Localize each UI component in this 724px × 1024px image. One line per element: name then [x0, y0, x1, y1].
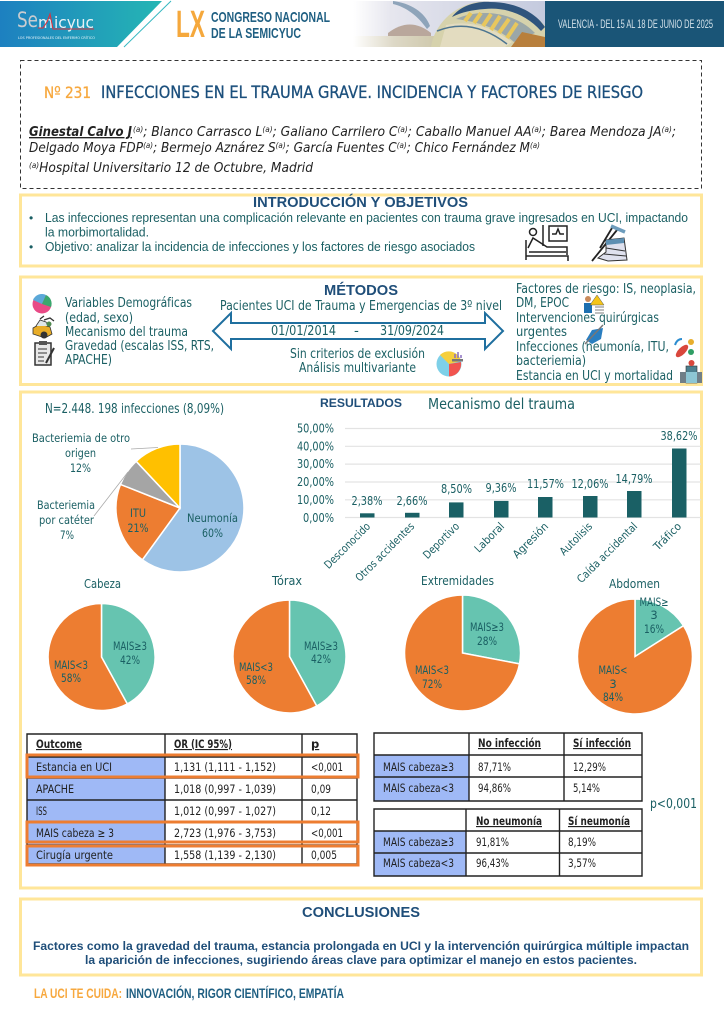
table: pneumonia by MAIS cabeza: Sí neumonía — [568, 814, 630, 828]
table: multivariate outcomes: ISS — [36, 804, 47, 818]
right variables list — [516, 281, 696, 384]
table: multivariate outcomes: Cirugía urgente — [36, 848, 113, 862]
table: multivariate outcomes: 0,09 — [311, 782, 331, 796]
panel: introduction and objectives — [20, 193, 702, 266]
heading: INTRODUCCIÓN Y OBJETIVOS — [253, 193, 468, 211]
pie chart: Cabeza: MAIS≥3 — [113, 639, 147, 653]
bar chart: trauma mechanism: 14,79% — [616, 471, 653, 486]
table: multivariate outcomes: 1,131 (1,111 - 1,152) — [174, 760, 276, 774]
pie chart: Extremidades: MAIS<3 — [415, 663, 449, 677]
table: infection by MAIS cabeza: MAIS cabeza≥3 — [383, 760, 454, 774]
bar chart: trauma mechanism: Tráfico — [650, 520, 684, 554]
pie chart: Extremidades: 28% — [477, 634, 497, 648]
footer slogan: LA UCI TE CUIDA: — [34, 985, 122, 1001]
pie chart: Abdomen — [577, 576, 692, 714]
pie chart: Abdomen: MAIS≥ — [640, 595, 668, 609]
table: multivariate outcomes: p — [311, 737, 319, 751]
logo band — [0, 1, 171, 47]
pie chart: infection types: por catéter — [39, 513, 94, 527]
pie chart: Abdomen: 84% — [603, 690, 623, 704]
pie chart: Abdomen: 3 — [650, 608, 658, 622]
arrow: study period: 31/09/2024 — [380, 323, 444, 339]
authors: ; Blanco Carrasco L — [143, 124, 262, 140]
pie chart: Tórax — [233, 573, 346, 713]
pie chart: Abdomen: Abdomen — [609, 576, 660, 591]
conclusion text: Factores como la gravedad del trauma, estancia prolongada en UCI y la intervención quirúrgica múltiple impactan — [33, 939, 689, 953]
table: multivariate outcomes: <0,001 — [311, 826, 343, 840]
left variables list: Mecanismo del trauma — [65, 324, 188, 340]
bar chart: trauma mechanism: Agresión — [510, 520, 551, 561]
authors: ; Barea Mendoza JA — [542, 124, 662, 140]
pie chart: Extremidades: 72% — [422, 677, 442, 691]
pie chart: Cabeza: 42% — [120, 653, 140, 667]
pie chart: Tórax: Tórax — [271, 573, 302, 588]
bar chart: trauma mechanism: 12,06% — [572, 476, 609, 491]
right variables list: Estancia en UCI y mortalidad — [516, 368, 673, 384]
pie chart: Tórax: MAIS<3 — [239, 660, 273, 674]
table: infection by MAIS cabeza: Sí infección — [573, 736, 631, 750]
bar chart: trauma mechanism: 2,38% — [352, 493, 383, 508]
icon: pie and bars — [436, 351, 463, 376]
bar chart: trauma mechanism: Laboral — [472, 520, 507, 555]
table: multivariate outcomes: 0,12 — [311, 804, 331, 818]
pie chart: infection types: Bacteriemia — [37, 498, 95, 512]
table: multivariate outcomes: MAIS cabeza ≥ 3 — [36, 826, 114, 840]
bar chart: trauma mechanism: 9,36% — [486, 480, 517, 495]
affiliation: (a) — [29, 161, 39, 170]
table: infection by MAIS cabeza: 5,14% — [573, 781, 600, 795]
bar chart: trauma mechanism: 20,00% — [297, 474, 334, 489]
abstract number: Nº 231 — [44, 83, 91, 102]
authors: Delgado Moya FDP — [29, 140, 156, 156]
pie chart: Abdomen: 16% — [644, 622, 664, 636]
conclusion text — [33, 939, 689, 967]
intro text: Las infecciones representan una complicación relevante en pacientes con trauma grave ingresados en UCI, impactando — [45, 211, 688, 225]
left variables list — [65, 295, 214, 368]
authors: (a) — [662, 125, 672, 134]
authors: ; García Fuentes C — [286, 140, 397, 156]
congress title: CONGRESO NACIONAL — [211, 9, 330, 26]
authors: (a) — [143, 141, 153, 150]
pie chart: Tórax: 58% — [246, 673, 266, 687]
authors: (a) — [532, 125, 542, 134]
table: infection by MAIS cabeza: MAIS cabeza<3 — [383, 781, 454, 795]
table: infection by MAIS cabeza — [374, 733, 642, 801]
table: pneumonia by MAIS cabeza: 96,43% — [476, 856, 509, 870]
heading: MÉTODOS — [324, 282, 398, 299]
pie chart: Tórax: MAIS≥3 — [304, 639, 338, 653]
left variables list: Gravedad (escalas ISS, RTS, — [65, 338, 214, 354]
icon: demographics — [32, 294, 52, 314]
intro text: la morbimortalidad. — [45, 226, 149, 240]
table: infection by MAIS cabeza: No infección — [478, 736, 541, 750]
icon: risk person warning — [584, 295, 604, 313]
bar chart: trauma mechanism: Deportivo — [420, 520, 462, 562]
highlight: Cirugía urgente — [27, 846, 358, 865]
icon: car crash — [33, 316, 54, 338]
footer slogan: INNOVACIÓN, RIGOR CIENTÍFICO, EMPATÍA — [126, 984, 344, 1001]
table: pneumonia by MAIS cabeza — [374, 809, 642, 876]
left variables list: (edad, sexo) — [65, 310, 133, 326]
authors: ; Bermejo Aznárez S — [153, 140, 276, 156]
highlight: MAIS cabeza — [27, 822, 358, 842]
pie chart: Cabeza: MAIS<3 — [54, 658, 88, 672]
pie chart: Cabeza: Cabeza — [84, 576, 121, 591]
table: multivariate outcomes: <0,001 — [311, 760, 343, 774]
intro text: • — [29, 211, 33, 225]
table: infection by MAIS cabeza: 12,29% — [573, 760, 606, 774]
intro text — [29, 211, 688, 254]
photo: Ciudad de las Artes — [353, 1, 545, 47]
bar chart: trauma mechanism: 11,57% — [527, 476, 564, 491]
icon: leg cast and crutch — [592, 226, 627, 261]
authors: (a) — [276, 141, 286, 150]
authors: (a) — [397, 141, 407, 150]
intro text: • — [29, 240, 33, 254]
intro text: Objetivo: analizar la incidencia de infecciones y los factores de riesgo asociados — [45, 240, 475, 254]
table: multivariate outcomes: 2,723 (1,976 - 3,753) — [174, 826, 276, 840]
bar chart: trauma mechanism: 50,00% — [297, 420, 334, 436]
bar chart: trauma mechanism: Autolisis — [557, 520, 595, 558]
p value: p<0,001 — [650, 796, 697, 812]
pie chart: infection types: origen — [65, 446, 96, 460]
table: multivariate outcomes: APACHE — [36, 782, 74, 796]
heading: RESULTADOS — [320, 398, 402, 410]
bar chart: trauma mechanism: 8,50% — [441, 481, 472, 496]
bar chart: trauma mechanism: 30,00% — [297, 456, 334, 471]
table: multivariate outcomes: Estancia en UCI — [36, 760, 112, 774]
pie chart: infection types: ITU — [130, 506, 146, 520]
footer slogan — [34, 984, 344, 1001]
pie chart: Tórax: 42% — [311, 652, 331, 666]
table: pneumonia by MAIS cabeza: 3,57% — [568, 856, 596, 870]
header banner — [0, 1, 724, 47]
sample size: N=2.448. 198 infecciones (8,09%) — [45, 401, 224, 417]
icon: gloved hand and scalpel — [585, 325, 603, 344]
table: pneumonia by MAIS cabeza: 91,81% — [476, 835, 509, 849]
conclusion text: la aparición de infecciones, sugiriendo áreas clave para optimizar el manejo en estos pacientes. — [85, 953, 637, 967]
table: multivariate outcomes — [27, 734, 358, 865]
pie chart: Cabeza: 58% — [61, 671, 81, 685]
pie chart: infection types: Neumonía — [187, 511, 238, 525]
authors: ; — [672, 124, 676, 140]
authors: (a) — [530, 141, 540, 150]
icon: clipboard — [35, 341, 54, 365]
table: infection by MAIS cabeza: 94,86% — [478, 781, 511, 795]
table: multivariate outcomes: OR (IC 95%) — [174, 737, 232, 751]
bar chart: trauma mechanism: Desconocido — [322, 520, 373, 572]
panel: conclusions — [20, 899, 702, 975]
chart title: Mecanismo del trauma — [428, 395, 575, 413]
pie chart: infection types: 7% — [60, 528, 74, 542]
authors: ; Galiano Carrilero C — [273, 124, 398, 140]
logo band: m — [38, 13, 53, 32]
pie chart: Cabeza — [48, 576, 155, 710]
date band — [545, 1, 724, 47]
panel: results — [20, 392, 702, 888]
congress title — [176, 4, 330, 46]
bar chart: trauma mechanism: 0,00% — [303, 510, 334, 525]
right variables list: Infecciones (neumonía, ITU, — [516, 339, 669, 355]
pie chart: infection types — [32, 431, 244, 572]
heading: CONCLUSIONES — [302, 905, 420, 921]
logo band: icyuc — [54, 13, 94, 32]
bar chart: trauma mechanism: 40,00% — [297, 438, 334, 454]
arrow: study period: - — [354, 323, 359, 339]
pie chart: Extremidades: Extremidades — [421, 573, 494, 588]
authors: ; Chico Fernández M — [407, 140, 530, 156]
criteria — [290, 346, 425, 376]
affiliation: Hospital Universitario 12 de Octubre, Madrid — [39, 160, 313, 176]
table: pneumonia by MAIS cabeza: MAIS cabeza<3 — [383, 856, 454, 870]
population: Pacientes UCI de Trauma y Emergencias de 3º nivel — [220, 298, 502, 314]
criteria: Sin criterios de exclusión — [290, 346, 425, 362]
panel: title and authors — [20, 60, 702, 188]
bar chart: trauma mechanism: 2,66% — [396, 493, 428, 508]
arrow: study period: 01/01/2014 — [271, 323, 336, 339]
pie chart: infection types: 21% — [128, 521, 149, 535]
authors: (a) — [133, 125, 143, 134]
table: pneumonia by MAIS cabeza: MAIS cabeza≥3 — [383, 835, 454, 849]
bar chart: trauma mechanism: Caída accidental — [574, 520, 640, 586]
pie chart: infection types: 60% — [202, 526, 223, 540]
table: multivariate outcomes: 0,005 — [311, 848, 337, 862]
authors: (a) — [398, 125, 408, 134]
right variables list: bacteriemia) — [516, 353, 586, 369]
pie chart: infection types: 12% — [70, 461, 91, 475]
left variables list: Variables Demográficas — [65, 295, 192, 311]
bar chart: trauma mechanism: 10,00% — [297, 492, 334, 507]
bar chart: trauma mechanism: Otros accidentes — [353, 520, 417, 584]
panel: methods — [20, 277, 702, 384]
icon: patient in bed — [526, 225, 568, 261]
table: infection by MAIS cabeza: 87,71% — [478, 760, 511, 774]
table: pneumonia by MAIS cabeza: No neumonía — [476, 814, 542, 828]
highlight: Estancia en UCI — [27, 755, 358, 777]
pie chart: Abdomen: 3 — [609, 677, 617, 691]
pie chart: Extremidades — [405, 573, 521, 711]
bar chart: trauma mechanism — [297, 395, 701, 586]
authors — [29, 124, 676, 156]
authors: Ginestal Calvo J — [29, 124, 132, 140]
main title: INFECCIONES EN EL TRAUMA GRAVE. INCIDENCIA Y FACTORES DE RIESGO — [101, 83, 643, 102]
right variables list: DM, EPOC — [516, 295, 569, 311]
authors: (a) — [262, 125, 273, 134]
table: multivariate outcomes: 1,012 (0,997 - 1,027) — [174, 804, 276, 818]
pie chart: Extremidades: MAIS≥3 — [470, 620, 504, 634]
criteria: Análisis multivariante — [299, 360, 416, 376]
left variables list: APACHE) — [65, 352, 112, 368]
logo band: LOS PROFESIONALES DEL ENFERMO CRÍTICO — [18, 35, 95, 40]
authors: ; Caballo Manuel AA — [408, 124, 532, 140]
icon: hospital — [680, 360, 702, 383]
bar chart: trauma mechanism: 38,62% — [660, 428, 698, 443]
right variables list: Intervenciones quirúrgicas — [516, 310, 659, 326]
icon: bacteria — [674, 339, 694, 359]
arrow: study period — [213, 313, 503, 349]
table: multivariate outcomes: 1,018 (0,997 - 1,039) — [174, 782, 276, 796]
logo band: Se — [17, 8, 38, 32]
pie chart: Abdomen: MAIS< — [598, 663, 628, 677]
congress title: LX — [176, 4, 205, 46]
table: multivariate outcomes: Outcome — [36, 737, 82, 751]
table: pneumonia by MAIS cabeza: 8,19% — [568, 835, 596, 849]
congress title: DE LA SEMICYUC — [211, 25, 301, 42]
pie chart: infection types: Bacteriemia de otro — [32, 431, 130, 445]
table: multivariate outcomes: 1,558 (1,139 - 2,130) — [174, 848, 276, 862]
right variables list: urgentes — [516, 324, 567, 340]
